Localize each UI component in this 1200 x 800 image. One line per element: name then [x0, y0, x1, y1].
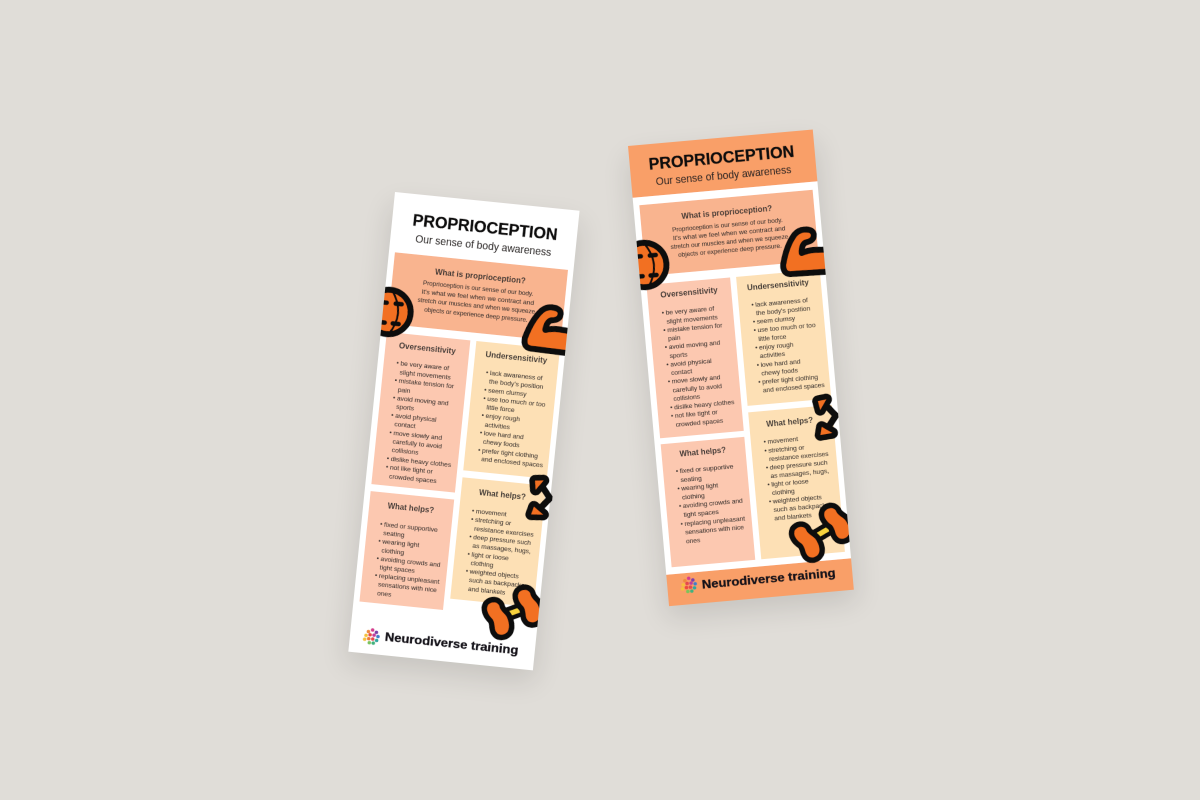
panel: undersensitivity: lack awareness of — [755, 297, 808, 309]
panel: oversensitivity: • — [391, 412, 394, 419]
panel: oversensitivity: • — [394, 378, 398, 385]
panel: oversensitivity: avoid physical — [395, 413, 437, 424]
icon: dumbbell — [481, 584, 540, 641]
panel: what helps (oversensitivity): tight spaces — [379, 564, 416, 575]
panel: what helps (oversensitivity): ones — [377, 590, 392, 599]
icon: dumbbell — [788, 502, 850, 564]
panel: what is proprioception — [639, 190, 819, 276]
panel: oversensitivity: move slowly and — [393, 430, 443, 442]
panel: undersensitivity: love hard and — [483, 430, 524, 441]
panel: undersensitivity: seem clumsy — [756, 315, 796, 326]
panel: what is proprioception: Proprioception is our sense of our body. — [423, 280, 534, 298]
panel: undersensitivity: • — [479, 430, 483, 437]
panel: what helps (undersensitivity): movement — [767, 436, 799, 446]
panel: what helps (undersensitivity): • — [471, 508, 475, 515]
panel: oversensitivity: • — [671, 413, 674, 420]
panel: what is proprioception — [388, 252, 568, 342]
panel: undersensitivity: • — [751, 302, 755, 309]
panel: what helps (undersensitivity): deep pressure such — [769, 459, 828, 472]
panel: oversensitivity — [646, 277, 744, 438]
panel: oversensitivity: • — [389, 429, 393, 437]
panel: what helps (undersensitivity): stretching or — [475, 517, 512, 528]
panel: what helps (undersensitivity): movement — [476, 508, 507, 518]
panel: what helps (undersensitivity) — [748, 405, 845, 559]
icon: baseball — [636, 239, 670, 290]
panel: undersensitivity: use too much or too — [757, 322, 816, 334]
panel: what helps (undersensitivity): • — [467, 551, 471, 558]
panel: oversensitivity: dislike heavy clothes — [391, 456, 452, 469]
panel: what helps (oversensitivity): sensations with nice — [685, 524, 745, 536]
panel: oversensitivity: • — [386, 455, 390, 463]
panel: what helps (oversensitivity): wearing light — [381, 539, 420, 549]
panel: undersensitivity: chewy foods — [761, 367, 799, 377]
logo wordmark: Neurodiverse training — [384, 632, 519, 657]
panel: what helps (oversensitivity): wearing light — [680, 483, 719, 493]
panel: undersensitivity: love hard and — [760, 358, 801, 369]
panel: oversensitivity: slight movements — [666, 314, 719, 326]
panel: oversensitivity: carefully to avoid — [392, 439, 443, 451]
header band — [628, 130, 817, 198]
panel: what helps (undersensitivity): such as backpacks — [469, 577, 525, 590]
icon: baseball — [380, 286, 414, 338]
title: PROPRIOCEPTION — [412, 210, 558, 244]
panel: undersensitivity: • — [753, 328, 757, 335]
panel: what helps (undersensitivity): and blankets — [468, 586, 506, 597]
panel: undersensitivity: • — [484, 387, 487, 394]
panel: what helps (undersensitivity): • — [763, 439, 767, 446]
panel: undersensitivity — [736, 269, 831, 406]
panel: oversensitivity: not like tight or — [675, 409, 719, 420]
panel: oversensitivity: not like tight or — [390, 465, 434, 476]
header band: Our sense of body awareness — [655, 164, 792, 188]
panel: what is proprioception: objects or experience deep pressure. — [424, 307, 528, 324]
panel: what helps (undersensitivity): deep pressure such — [473, 534, 532, 547]
panel: what helps (oversensitivity): ones — [686, 537, 701, 545]
panel: what helps (undersensitivity): resistance exercises — [474, 526, 535, 539]
panel: what helps (oversensitivity): tight spaces — [683, 509, 720, 519]
panel: undersensitivity: little force — [758, 334, 787, 343]
panel: what helps (oversensitivity): • — [676, 468, 679, 476]
panel: undersensitivity: and enclosed spaces — [481, 456, 544, 469]
panel: what helps (oversensitivity): replacing unpleasant — [379, 573, 440, 586]
panel: what helps (undersensitivity): • — [465, 568, 469, 575]
panel: what helps (undersensitivity): weighted objects — [772, 494, 823, 506]
panel: what helps (oversensitivity): clothing — [682, 492, 705, 501]
panel: undersensitivity: prefer tight clothing — [482, 447, 539, 460]
panel: white bookmark card — [331, 190, 588, 683]
panel: what is proprioception: It's what we feel when we contract and — [421, 289, 535, 307]
panel: undersensitivity: prefer tight clothing — [762, 374, 819, 386]
panel: what helps (oversensitivity): replacing unpleasant — [684, 515, 746, 528]
panel: undersensitivity: use too much or too — [487, 396, 546, 409]
footer band — [666, 558, 854, 606]
footer band: Neurodiverse training — [702, 568, 836, 592]
panel: oversensitivity: • — [661, 310, 665, 317]
panel: undersensitivity: Undersensitivity — [747, 278, 810, 292]
icon: logo dots — [362, 627, 381, 645]
panel: what helps (oversensitivity): clothing — [381, 547, 405, 557]
panel: oversensitivity: mistake tension for — [667, 322, 724, 334]
panel: undersensitivity: activities — [484, 422, 511, 431]
panel: oversensitivity: • — [392, 395, 396, 402]
panel: undersensitivity: • — [478, 447, 481, 454]
subtitle: Our sense of body awareness — [415, 233, 552, 259]
panel: what is proprioception: What is proprioception? — [681, 204, 773, 221]
panel: oversensitivity: Oversensitivity — [399, 341, 457, 356]
panel: oversensitivity: crowded spaces — [675, 417, 724, 429]
panel: what helps (undersensitivity): • — [764, 448, 768, 455]
panel: what helps (undersensitivity): • — [471, 517, 474, 524]
panel: oversensitivity: crowded spaces — [389, 473, 438, 485]
panel: what helps (oversensitivity): • — [378, 538, 382, 546]
panel: what helps (oversensitivity) — [661, 437, 755, 567]
panel: what helps (undersensitivity): • — [469, 534, 473, 541]
panel: what helps (undersensitivity): • — [766, 465, 769, 472]
icon: flexed arm — [780, 227, 832, 276]
panel: undersensitivity: • — [756, 362, 760, 369]
panel: what helps (undersensitivity) — [450, 477, 546, 607]
panel: what helps (oversensitivity): • — [376, 555, 380, 563]
panel: undersensitivity: • — [483, 395, 487, 403]
icon: arrows — [817, 399, 837, 435]
panel: oversensitivity: • — [385, 464, 389, 471]
panel: oversensitivity: be very aware of — [400, 361, 450, 373]
panel: oversensitivity: carefully to avoid — [672, 383, 723, 394]
panel: what helps (oversensitivity) — [359, 491, 454, 610]
panel: what helps (oversensitivity): • — [679, 503, 682, 511]
panel: undersensitivity: the body's position — [489, 379, 544, 391]
panel: oversensitivity: sports — [669, 351, 688, 360]
panel: undersensitivity: lack awareness of — [490, 370, 543, 382]
panel: undersensitivity: • — [758, 379, 762, 386]
panel: undersensitivity: • — [481, 413, 485, 420]
panel: what helps (oversensitivity): • — [374, 573, 378, 580]
panel: what helps (undersensitivity): clothing — [470, 560, 494, 569]
panel: what is proprioception: stretch our muscles and when we squeeze — [670, 234, 789, 251]
panel: what helps (undersensitivity): stretching or — [768, 444, 806, 455]
panel: oversensitivity: sports — [396, 404, 415, 413]
panel: oversensitivity — [371, 332, 470, 493]
panel: oversensitivity: Oversensitivity — [660, 286, 719, 300]
panel: what helps (undersensitivity): • — [769, 499, 772, 506]
panel: oversensitivity: mistake tension for — [398, 378, 455, 391]
panel: what helps (undersensitivity): resistance exercises — [769, 451, 830, 463]
panel: what helps (undersensitivity): light or loose — [771, 478, 809, 489]
panel: undersensitivity: little force — [486, 404, 515, 414]
panel: oversensitivity: contact — [671, 368, 693, 377]
panel: oversensitivity: • — [670, 405, 673, 412]
panel: undersensitivity: activities — [760, 351, 786, 360]
panel: what is proprioception: objects or experience deep pressure. — [678, 243, 782, 259]
panel: oversensitivity: avoid moving and — [668, 340, 721, 351]
panel: oversensitivity: slight movements — [399, 369, 452, 382]
panel: what helps (oversensitivity): fixed or supportive — [679, 463, 734, 475]
panel: undersensitivity: seem clumsy — [488, 387, 528, 398]
panel: oversensitivity: • — [668, 379, 671, 386]
panel: oversensitivity: contact — [394, 421, 416, 430]
panel: orange-header bookmark card — [611, 129, 863, 620]
panel: what helps (oversensitivity): • — [677, 486, 681, 493]
icon: logo dots — [680, 576, 698, 594]
panel: what helps (undersensitivity): as massages, hugs, — [472, 543, 531, 556]
panel: what helps (undersensitivity): such as backpacks — [773, 502, 830, 514]
panel: undersensitivity: and enclosed spaces — [763, 382, 826, 395]
panel: what helps (oversensitivity): seating — [383, 530, 405, 539]
panel: what is proprioception: It's what we feel when we contract and — [673, 225, 786, 242]
panel: what is proprioception: What is proprioception? — [435, 267, 526, 286]
panel: oversensitivity: • — [666, 362, 670, 369]
header band: PROPRIOCEPTION — [648, 142, 795, 174]
panel: what helps (oversensitivity): What helps? — [387, 501, 435, 515]
panel: what helps (oversensitivity): avoiding crowds and — [380, 556, 441, 569]
panel: what helps (oversensitivity): fixed or supportive — [384, 522, 438, 534]
panel: what helps (undersensitivity): and blankets — [774, 512, 813, 523]
panel: what is proprioception: Proprioception is our sense of our body. — [672, 217, 783, 234]
panel: undersensitivity: • — [755, 345, 759, 352]
icon: arrows — [531, 480, 552, 516]
panel: what helps (undersensitivity): • — [767, 482, 771, 489]
panel: undersensitivity: chewy foods — [483, 439, 520, 450]
panel: what helps (undersensitivity): as massages, hugs, — [770, 468, 829, 480]
panel: what helps (undersensitivity): weighted objects — [468, 569, 520, 581]
panel: what helps (oversensitivity): • — [380, 521, 383, 528]
panel: oversensitivity: • — [665, 344, 668, 352]
panel: undersensitivity: enjoy rough — [759, 342, 794, 352]
panel: oversensitivity: avoid moving and — [397, 395, 449, 408]
panel: oversensitivity: • — [396, 360, 400, 368]
panel: what helps (oversensitivity): avoiding crowds and — [683, 498, 743, 510]
panel: oversensitivity: • — [663, 327, 667, 334]
panel: undersensitivity: Undersensitivity — [485, 350, 548, 365]
panel: what helps (undersensitivity): What helps? — [766, 416, 814, 429]
panel: undersensitivity: • — [486, 370, 489, 377]
panel: oversensitivity: pain — [398, 387, 411, 395]
panel: undersensitivity: enjoy rough — [485, 413, 521, 424]
panel: what helps (undersensitivity): clothing — [772, 488, 795, 497]
panel: undersensitivity: the body's position — [756, 305, 811, 317]
icon: flexed arm — [524, 305, 576, 354]
panel: oversensitivity: move slowly and — [672, 374, 721, 386]
panel: oversensitivity: be very aware of — [665, 306, 715, 317]
panel: what helps (oversensitivity): sensations with nice — [378, 582, 437, 594]
panel: what is proprioception: stretch our muscles and when we squeeze — [417, 297, 536, 316]
panel: what helps (undersensitivity): light or loose — [471, 551, 509, 562]
panel: what helps (oversensitivity): • — [680, 521, 684, 528]
panel: oversensitivity: avoid physical — [670, 358, 712, 368]
panel: oversensitivity: collisions — [673, 393, 701, 403]
panel: oversensitivity: collisions — [391, 447, 419, 457]
panel: undersensitivity: • — [753, 319, 756, 326]
panel: what helps (undersensitivity): What helps? — [479, 488, 526, 502]
panel: oversensitivity: pain — [668, 335, 681, 343]
panel: oversensitivity: dislike heavy clothes — [674, 399, 735, 411]
panel: what helps (oversensitivity): What helps? — [679, 446, 726, 459]
panel: what helps (oversensitivity): seating — [680, 475, 702, 484]
panel: undersensitivity — [463, 341, 560, 479]
